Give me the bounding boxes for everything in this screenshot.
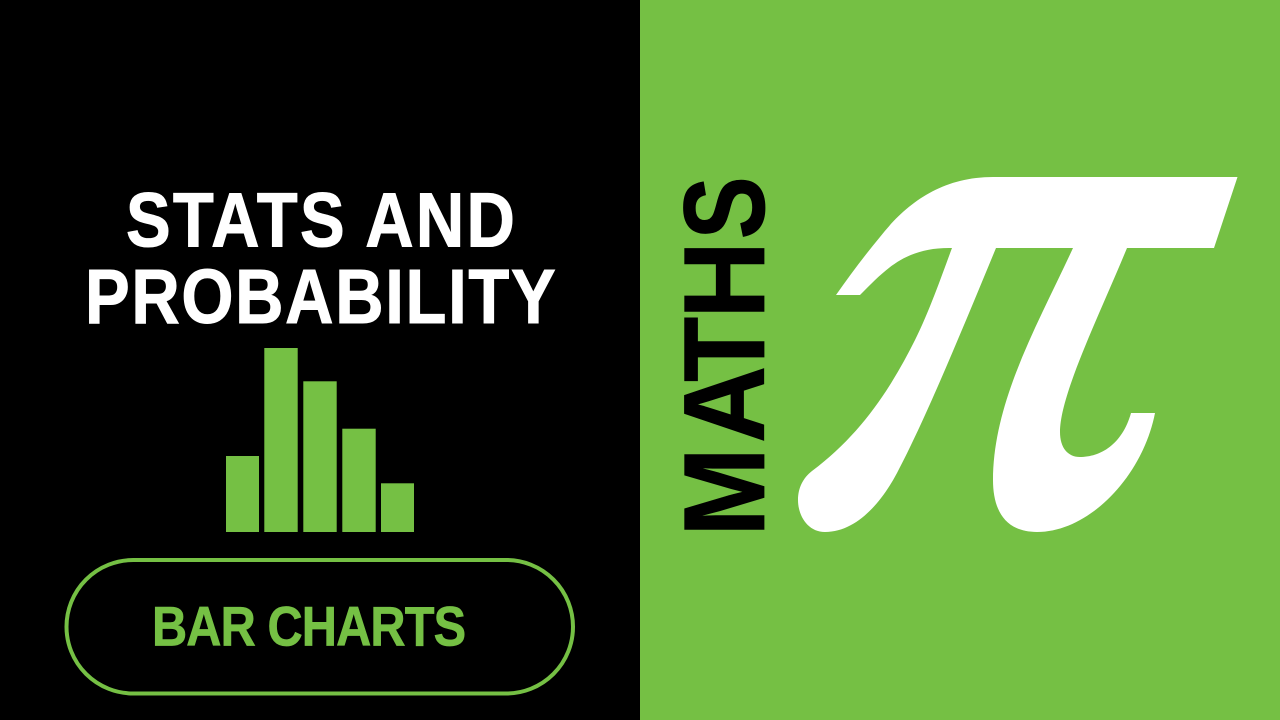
title: stats and probability: PROBABILITY — [85, 255, 556, 340]
icon: bar chart — [226, 348, 414, 532]
topic pill: bar charts — [66, 560, 573, 694]
subject label: maths: S — [661, 176, 789, 239]
topic pill: bar charts: BAR CHARTS — [152, 596, 466, 659]
panel: black left side — [0, 0, 640, 720]
title: stats and probability: STATS AND — [126, 178, 515, 263]
icon: pi symbol — [798, 177, 1238, 532]
panel: green right side — [640, 0, 1280, 720]
subject label: maths: MATH — [659, 241, 789, 536]
title: stats and probability — [85, 178, 556, 340]
